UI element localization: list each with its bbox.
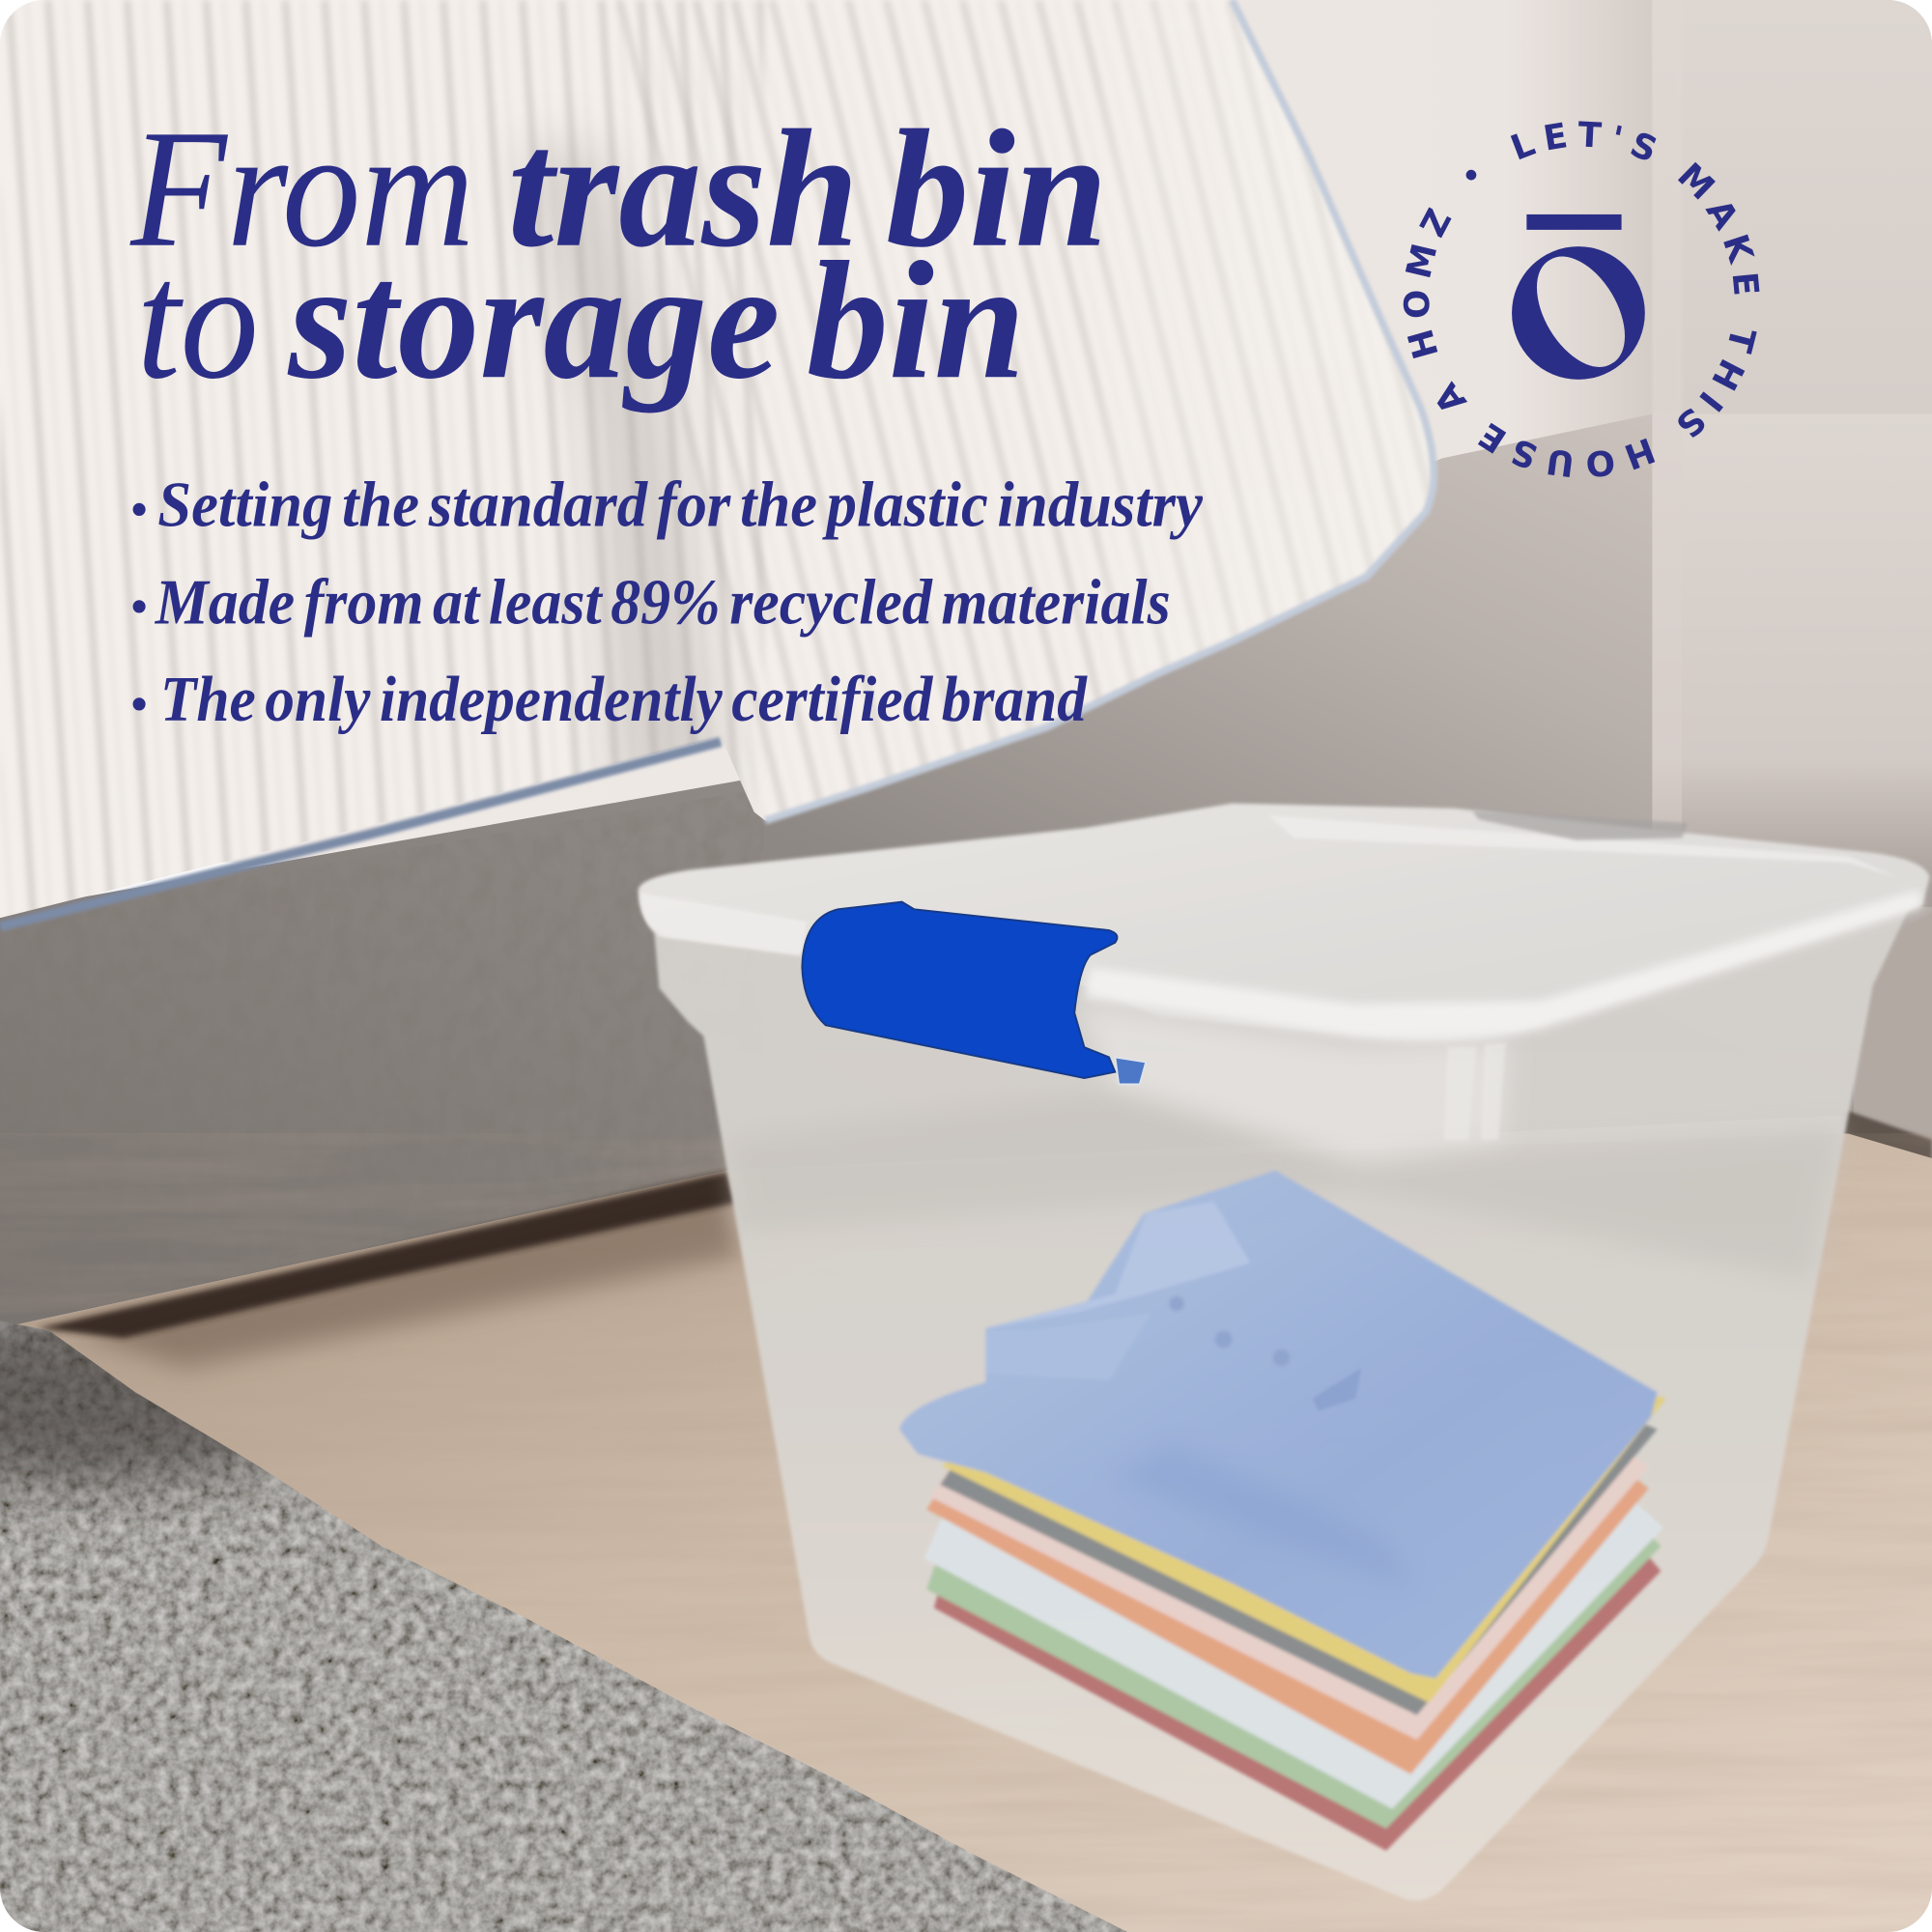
bullet 1: Setting the standard for the plastic industry	[157, 470, 1203, 541]
duvet lower edge	[0, 742, 721, 926]
photo background: wall	[222, 0, 1932, 863]
heading: trash bin	[508, 95, 1108, 282]
storage bin	[639, 804, 1929, 1900]
folded clothes stack	[899, 1171, 1665, 1851]
photo background: grey bed base and skirting	[0, 414, 1932, 1331]
photo background: striped duvet	[0, 0, 1479, 936]
handle clip	[1115, 1057, 1146, 1084]
blue handle	[802, 902, 1117, 1078]
photo background: rug	[0, 1306, 1146, 1932]
bullet 3: The only independently certified brand	[160, 665, 1088, 735]
lid clip back	[1472, 810, 1688, 840]
heading: to	[137, 226, 259, 413]
photo background: wooden floor	[0, 1133, 1932, 1932]
heading	[129, 95, 1108, 413]
icon: o with macron	[1512, 214, 1645, 380]
bullet 1: •	[130, 484, 147, 535]
lid front skirt	[1078, 1005, 1509, 1161]
bin inner shadow band	[719, 1107, 1849, 1268]
circular slogan: LET'S MAKE THIS HOUSE A HOMZ	[1403, 121, 1760, 477]
bin ribs	[1444, 1042, 1506, 1140]
bullet 2: •	[130, 582, 147, 633]
bullet 3: •	[130, 679, 147, 730]
bullet 2: Made from at least 89% recycled materials	[155, 567, 1171, 638]
duvet piped edge	[765, 0, 1434, 820]
lid left rim	[640, 894, 807, 956]
blue polo shirt	[899, 1171, 1658, 1678]
heading: storage bin	[287, 226, 1025, 413]
bullet list	[130, 470, 1203, 735]
bin body	[654, 894, 1916, 1900]
bin lid	[639, 804, 1929, 1039]
lid back rim	[1269, 815, 1897, 877]
heading: From	[129, 95, 474, 282]
logo badge	[1403, 121, 1760, 477]
shadow below bed	[37, 1172, 739, 1368]
lid highlight rim	[1084, 890, 1922, 1041]
